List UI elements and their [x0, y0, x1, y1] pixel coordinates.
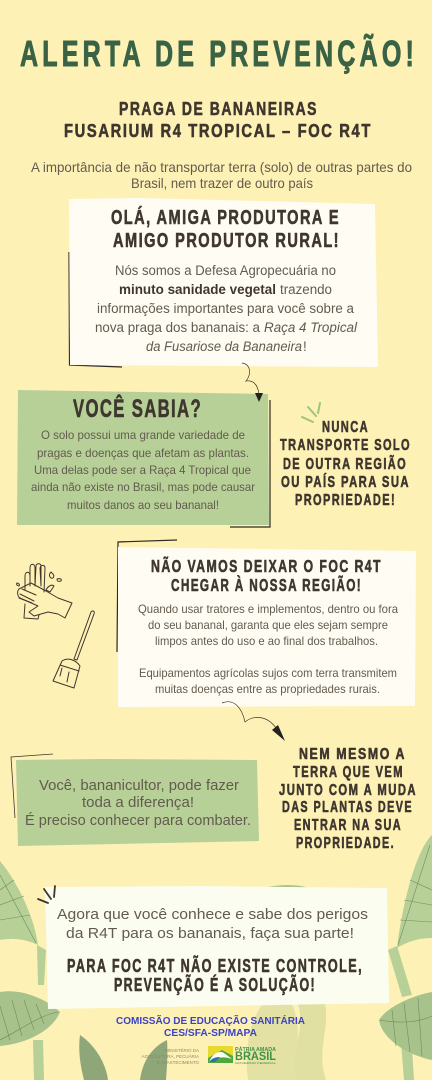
greeting body: Raça 4 Tropical: [264, 320, 358, 335]
você sabia body: [31, 428, 255, 512]
panel heading: [151, 555, 382, 595]
background foliage: [0, 835, 432, 1080]
sparks: green: [302, 403, 320, 422]
sparks: dark: [38, 886, 55, 903]
logo: ministério: E ABASTECIMENTO: [157, 1060, 199, 1065]
você sabia body: muitos danos ao seu bananal!: [67, 498, 219, 512]
logo: ministério: MINISTÉRIO DA: [165, 1047, 199, 1053]
icon: broom: [53, 611, 94, 688]
panel body: Quando usar tratores e implementos, dentro ou fora: [138, 602, 398, 616]
icon: washing hands: [17, 564, 72, 619]
callout: nunca transporte solo: [280, 419, 411, 509]
closing text: [57, 906, 368, 942]
greeting body: Nós somos a Defesa Agropecuária no: [115, 263, 336, 278]
logo: pátria amada brasil: BRASIL: [235, 1049, 276, 1063]
greeting body: minuto sanidade vegetal: [119, 282, 276, 297]
greeting body: [95, 263, 358, 354]
bananicultor text: É preciso conhecer para combater.: [25, 812, 251, 829]
closing heading: PREVENÇÃO É A SOLUÇÃO!: [114, 974, 316, 995]
closing text: da R4T para os bananais, faça sua parte!: [66, 925, 354, 942]
greeting heading: OLÁ, AMIGA PRODUTORA E: [111, 206, 340, 229]
closing heading: [67, 955, 363, 995]
commission credit: COMISSÃO DE EDUCAÇÃO SANITÁRIA: [116, 1014, 305, 1027]
greeting body: da Fusariose da Bananeira: [146, 339, 302, 354]
bananicultor text: [25, 778, 251, 829]
greeting body: informações importantes para você sobre a: [97, 301, 354, 316]
greeting heading: AMIGO PRODUTOR RURAL!: [113, 230, 340, 252]
panel body: [138, 602, 398, 696]
arrow: greeting to você sabia: [242, 363, 263, 402]
logo: pátria amada brasil: [235, 1046, 276, 1065]
bananicultor text: toda a diferença!: [82, 795, 194, 811]
greeting heading: [111, 206, 340, 252]
você sabia body: O solo possui uma grande variedade de: [41, 428, 245, 442]
greeting body: nova praga dos bananais: a: [95, 320, 260, 335]
panel body: do seu bananal, garanta que eles sejam sempre: [148, 618, 388, 632]
logo: ministério: [142, 1047, 199, 1065]
panel body: Equipamentos agrícolas sujos com terra transmitem: [139, 666, 397, 680]
você sabia body: pragas e doenças que afetam as plantas.: [37, 446, 249, 460]
bananicultor text: Você, bananicultor, pode fazer: [39, 778, 239, 794]
greeting body: trazendo: [280, 282, 332, 297]
commission credit: CES/SFA-SP/MAPA: [164, 1027, 257, 1039]
subtitle: PRAGA DE BANANEIRAS: [119, 99, 318, 119]
panel: não vamos deixar: [117, 540, 416, 707]
você sabia body: ainda não existe no Brasil, mas pode causar: [31, 480, 255, 494]
panel body: limpos antes do uso e ao final dos trabalhos.: [155, 634, 378, 648]
logo: pátria amada brasil: GOVERNO FEDERAL: [235, 1061, 276, 1065]
panel: você sabia: [17, 390, 270, 527]
commission credit: [116, 1014, 305, 1039]
intro text: A importância de não transportar terra (solo) de outras partes do: [31, 159, 412, 175]
intro text: Brasil, nem trazer de outro país: [131, 175, 313, 191]
intro text: [31, 159, 412, 191]
callout: nunca transporte solo: NUNCA: [322, 419, 369, 436]
closing text: Agora que você conhece e sabe dos perigos: [57, 906, 368, 923]
callout: nem mesmo a terra: [279, 746, 417, 852]
panel: bananicultor: [11, 754, 259, 846]
logo: pátria amada brasil: PÁTRIA AMADA: [235, 1046, 276, 1053]
greeting body: !: [303, 339, 307, 354]
panel: greeting: [69, 198, 378, 367]
você sabia heading: VOCÊ SABIA?: [73, 393, 202, 423]
logo: ministério: AGRICULTURA, PECUÁRIA: [142, 1053, 199, 1059]
logo: brasil flag: [208, 1046, 233, 1063]
você sabia body: Uma delas pode ser a Raça 4 Tropical que: [34, 463, 251, 477]
callout: nem mesmo a terra: NEM MESMO A: [299, 746, 406, 763]
arrow: panel to callout: [222, 702, 285, 741]
panel: faça sua parte: [45, 886, 389, 1009]
subtitle: [64, 99, 372, 141]
panel body: muitas doenças entre as propriedades rurais.: [155, 682, 380, 696]
subtitle: FUSARIUM R4 TROPICAL – FOC R4T: [64, 121, 372, 141]
